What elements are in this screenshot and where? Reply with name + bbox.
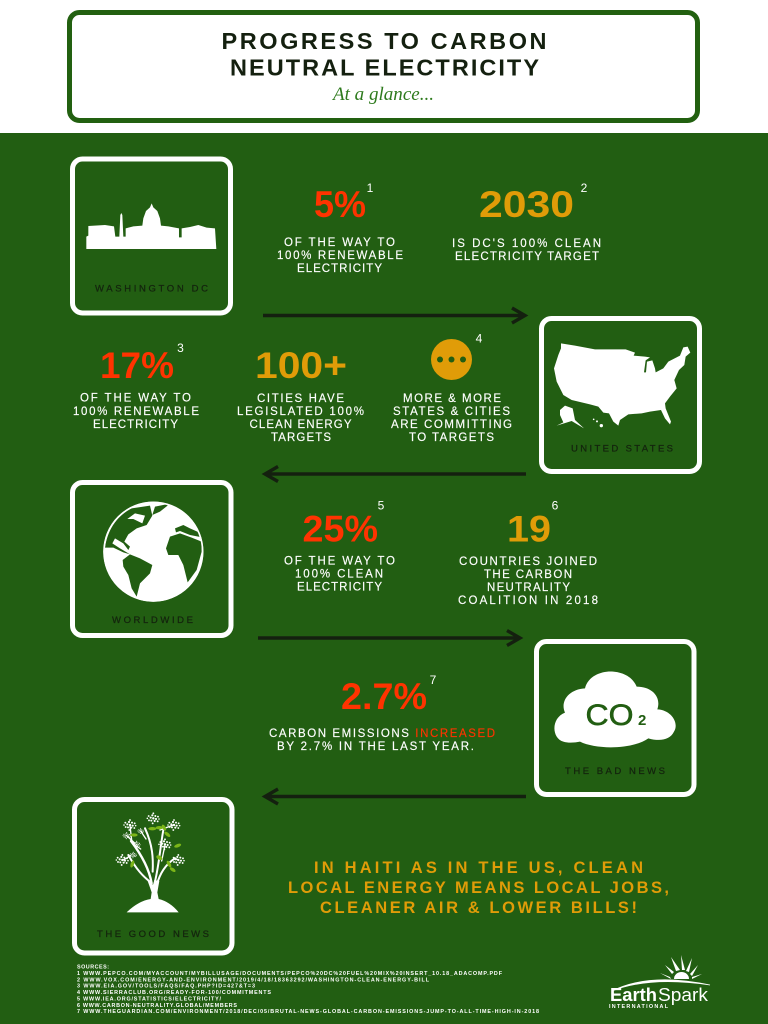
heading: NEUTRAL ELECTRICITY <box>230 54 539 80</box>
stat: 2030: 2 <box>581 181 588 195</box>
stat: 2.7%: BY 2.7% IN THE LAST YEAR. <box>277 741 474 753</box>
subtitle: At a glance... <box>331 84 434 105</box>
stat: 100+: CITIES HAVE <box>257 393 344 405</box>
sources list: SOURCES: <box>77 964 109 970</box>
stat: 17%: 17% <box>100 345 174 386</box>
stat: 5%: ELECTRICITY <box>297 263 382 275</box>
label: UNITED STATES <box>571 444 673 455</box>
stat: 19: THE CARBON <box>484 569 572 581</box>
stat: 5%: 100% RENEWABLE <box>277 250 403 262</box>
panel: Washington DC <box>72 159 230 313</box>
sources list: 2 WWW.VOX.COM/ENERGY-AND-ENVIRONMENT/2019/4/18/18363292/WASHINGTON-CLEAN-ENERGY-BILL <box>77 978 430 984</box>
stat: 19: NEUTRALITY <box>487 582 570 594</box>
sources list <box>77 964 539 1015</box>
stat: 17%: 3 <box>177 341 184 355</box>
arrow: right <box>263 308 525 323</box>
stat: 2.7%: CARBON EMISSIONS INCREASED <box>269 728 495 740</box>
sources list: 6 WWW.CARBON-NEUTRALITY.GLOBAL/MEMBERS <box>77 1003 237 1009</box>
stat: 17%: 100% RENEWABLE <box>73 406 199 418</box>
stat: 100+: CLEAN ENERGY <box>250 419 352 431</box>
stat: 25%: OF THE WAY TO <box>284 556 395 568</box>
stat: 2.7%: 2.7% <box>341 676 427 717</box>
stat: 19: 19 <box>507 509 551 550</box>
icon: rising sun <box>612 955 710 991</box>
stat: 17%: OF THE WAY TO <box>80 393 191 405</box>
callout: good news message: CLEANER AIR & LOWER BILLS! <box>320 899 637 917</box>
stat: 5% <box>277 181 403 275</box>
stat: 19: COALITION IN 2018 <box>458 595 598 607</box>
heading: PROGRESS TO CARBON <box>222 28 546 54</box>
icon: globe <box>103 502 203 602</box>
stat: more and more: TO TARGETS <box>409 432 494 444</box>
stat: 19: 6 <box>552 498 559 512</box>
stat: 25%: 100% CLEAN <box>295 569 383 581</box>
panel: United States <box>542 318 700 472</box>
stat: 19: COUNTRIES JOINED <box>459 556 597 568</box>
stat: 5%: 1 <box>367 181 374 195</box>
sources list: 3 WWW.EIA.GOV/TOOLS/FAQS/FAQ.PHP?ID=427&T=3 <box>77 984 255 990</box>
arrow: right <box>258 630 520 646</box>
logo: EarthSpark International <box>609 955 710 1010</box>
stat: 17%: ELECTRICITY <box>93 419 178 431</box>
panel: Worldwide <box>72 482 231 636</box>
icon: US map <box>554 343 690 428</box>
icon: speech dots <box>431 339 472 380</box>
panel: the bad news <box>536 642 694 794</box>
logo: EarthSpark International: INTERNATIONAL <box>609 1004 669 1010</box>
stat: more and more: 4 <box>476 332 483 346</box>
stat: 17% <box>73 341 199 431</box>
label: THE GOOD NEWS <box>97 929 209 940</box>
logo: EarthSpark International: Spark <box>658 984 709 1005</box>
stat: 2.7% <box>269 673 495 753</box>
stat: 2030: ELECTRICITY TARGET <box>455 251 599 263</box>
stat: 25%: 25% <box>302 509 378 550</box>
stat: 100+: LEGISLATED 100% <box>237 406 364 418</box>
sources list: 5 WWW.IEA.ORG/STATISTICS/ELECTRICITY/ <box>77 996 221 1002</box>
stat: 19 <box>458 498 598 607</box>
logo: EarthSpark International: Earth <box>610 984 657 1005</box>
label: WASHINGTON DC <box>95 284 208 295</box>
sources list: 7 WWW.THEGUARDIAN.COM/ENVIRONMENT/2018/DEC/05/BRUTAL-NEWS-GLOBAL-CARBON-EMISSIONS-JUMP-TO-ALL-TIME-HIGH-IN-2018 <box>77 1009 539 1015</box>
stat: 25%: ELECTRICITY <box>297 582 382 594</box>
stat: 25%: 5 <box>378 498 385 512</box>
stat: 2030: IS DC'S 100% CLEAN <box>452 238 601 250</box>
callout: good news message: LOCAL ENERGY MEANS LOCAL JOBS, <box>288 879 669 897</box>
stat: 2030 <box>452 181 601 263</box>
stat: 25% <box>284 498 395 594</box>
stat: more and more <box>391 332 512 444</box>
heading <box>222 28 546 80</box>
arrow: left <box>265 466 526 482</box>
callout: good news message <box>288 859 669 917</box>
stat: 2.7%: 7 <box>430 673 437 687</box>
stat: 100+: 100+ <box>255 345 347 386</box>
stat: 5%: 5% <box>314 184 366 225</box>
icon: CO2 cloud: 2 <box>638 712 646 729</box>
icon: tree <box>116 812 185 912</box>
icon: CO2 cloud: CO <box>586 699 634 732</box>
sources list: 1 WWW.PEPCO.COM/MYACCOUNT/MYBILLUSAGE/DOCUMENTS/PEPCO%20DC%20FUEL%20MIX%20INSERT_10.18_ADACOMP.PDF <box>77 971 503 977</box>
stat: 2030: 2030 <box>479 184 574 225</box>
icon: CO2 cloud <box>554 672 676 747</box>
title panel <box>70 12 698 120</box>
panel: the good news <box>74 800 232 953</box>
stat: 100+ <box>237 345 364 444</box>
stat: 5%: OF THE WAY TO <box>284 237 395 249</box>
arrow: left <box>265 789 526 804</box>
sources list: 4 WWW.SIERRACLUB.ORG/READY-FOR-100/COMMITMENTS <box>77 990 271 996</box>
label: THE BAD NEWS <box>565 766 665 777</box>
stat: more and more: MORE & MORE <box>403 393 501 405</box>
callout: good news message: IN HAITI AS IN THE US, CLEAN <box>314 859 643 877</box>
stat: more and more: ARE COMMITTING <box>391 419 512 431</box>
stat: 100+: TARGETS <box>271 432 331 444</box>
label: WORLDWIDE <box>112 615 193 626</box>
stat: more and more: STATES & CITIES <box>393 406 510 418</box>
icon: DC skyline <box>86 203 216 249</box>
